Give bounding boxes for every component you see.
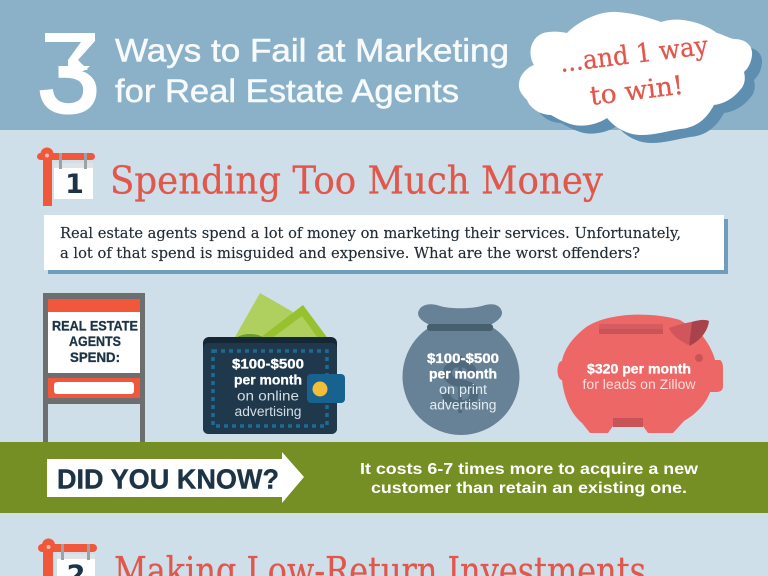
wallet text: $100-$500 — [232, 356, 304, 372]
arrow label: DID YOU KNOW? — [57, 464, 279, 494]
bag text — [427, 351, 499, 412]
sign text: AGENTS — [69, 334, 121, 349]
arrow label — [47, 452, 304, 503]
money bag icon: $ — [441, 345, 479, 423]
piggy bank icon — [558, 315, 723, 433]
wallet text: on online — [237, 388, 299, 404]
cloud text: ...and 1 way — [558, 31, 710, 79]
wallet icon — [203, 293, 345, 434]
section 1 icon: calendar sign — [37, 148, 95, 206]
section 2 icon: calendar sign — [38, 538, 97, 576]
sign text: REAL ESTATE — [52, 318, 138, 334]
intro text box: a lot of that spend is misguided and expensive. What are the worst offenders? — [60, 244, 640, 262]
fact text: customer than retain an existing one. — [371, 480, 687, 497]
header band — [0, 0, 768, 137]
section 1 heading: Spending Too Much Money — [110, 158, 603, 202]
intro text box — [44, 215, 728, 274]
sign text — [52, 318, 138, 365]
wallet text: per month — [234, 372, 302, 388]
real estate sign — [43, 293, 145, 442]
wallet text: advertising — [234, 404, 302, 419]
header title: Ways to Fail at Marketing — [115, 32, 509, 68]
bag text: advertising — [430, 398, 496, 412]
fact text — [360, 461, 699, 497]
fact text: It costs 6-7 times more to acquire a new — [360, 461, 699, 478]
bag text: $100-$500 — [427, 351, 499, 366]
did you know banner — [0, 442, 768, 513]
piggy text: for leads on Zillow — [582, 377, 696, 392]
big number 3: 3 — [37, 10, 100, 137]
bag text: on print — [439, 382, 487, 397]
money bag icon — [402, 304, 520, 435]
cloud callout — [519, 12, 762, 143]
cloud text — [558, 31, 710, 112]
header title: for Real Estate Agents — [115, 73, 459, 109]
wallet text — [232, 356, 304, 419]
piggy text: $320 per month — [587, 362, 691, 376]
bag text: per month — [429, 366, 497, 382]
intro text box: Real estate agents spend a lot of money on marketing their services. Unfortunately, — [60, 224, 681, 242]
sign text: SPEND: — [70, 350, 120, 365]
big number 3 — [40, 33, 96, 114]
piggy text — [582, 362, 696, 392]
header title — [115, 32, 509, 109]
cloud text: to win! — [588, 71, 685, 112]
section 1 icon: calendar sign: 1 — [65, 169, 84, 200]
